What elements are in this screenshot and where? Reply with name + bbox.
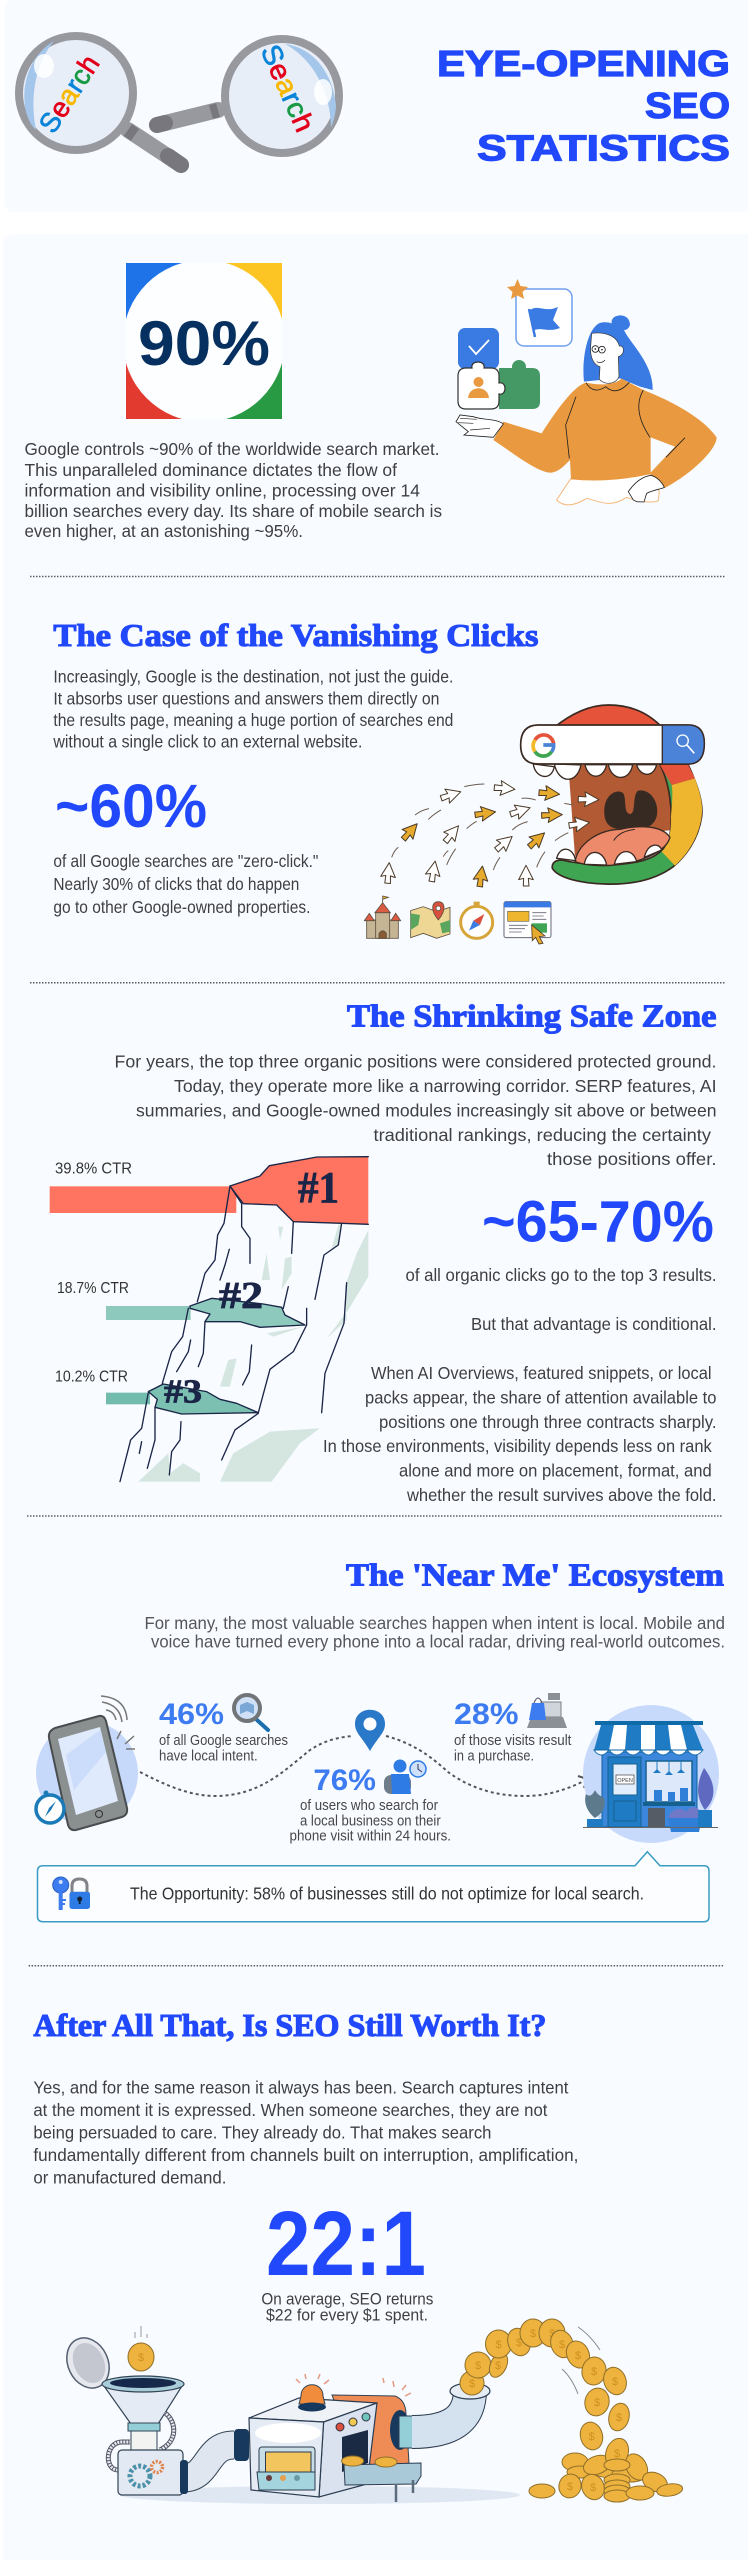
stat: 28 percent: of those visits result [454, 1732, 572, 1749]
text block: intro: Today, they operate more like a narrowing corridor. SERP features, AI [174, 1076, 716, 1096]
stat: 76 percent: phone visit within 24 hours. [290, 1828, 451, 1845]
heading: The Shrinking Safe Zone [347, 997, 716, 1033]
icon: magnifying glasses: Search [255, 40, 321, 136]
icon: storefront [583, 1705, 719, 1843]
coin pile: $ [614, 2448, 620, 2460]
text block: intro: It absorbs user questions and answers them directly on [53, 688, 439, 708]
stat: 22 to 1: 22:1 [266, 2193, 426, 2295]
stat: 28 percent: 28% [454, 1698, 518, 1731]
coins stream: $ [612, 2376, 618, 2388]
stat: 46 percent [159, 1695, 288, 1764]
icon: castle [364, 896, 401, 938]
section: market share [24, 260, 717, 541]
text block: top results: In those environments, visibility depends less on rank [323, 1436, 712, 1456]
coins stream: $ [616, 2412, 622, 2424]
coin pile: $ [567, 2481, 573, 2493]
text block: market share: Google controls ~90% of the worldwide search market. [24, 439, 440, 459]
section: vanishing clicks [52, 617, 704, 944]
text block: intro: without a single click to an external website. [52, 732, 362, 752]
caption: return on spend: $22 for every $1 spent. [266, 2307, 428, 2325]
stat: 76 percent [290, 1760, 451, 1845]
illustration: search bar mouth eating clicks [364, 705, 704, 944]
icon: magnifying glasses [19, 36, 339, 165]
title [437, 43, 730, 168]
text block: answer: fundamentally different from channels built on interruption, amplification, [33, 2145, 578, 2165]
coins stream: $ [495, 2339, 502, 2351]
chart: cliff of click-through rates: 10.2% CTR [55, 1369, 128, 1386]
stat: 46 percent: have local intent. [159, 1747, 258, 1764]
text block: intro: Increasingly, Google is the destination, not just the guide. [53, 667, 453, 687]
coin pile: $ [590, 2482, 596, 2494]
stat card: 90 percent [123, 260, 285, 422]
text block: top results: When AI Overviews, featured snippets, or local [371, 1363, 712, 1383]
heading: The Case of the Vanishing Clicks [53, 617, 538, 653]
coins stream: $ [594, 2397, 600, 2409]
text block: answer: at the moment it is expressed. When someone searches, they are not [33, 2100, 548, 2120]
icon: key and lock [53, 1877, 90, 1910]
icon: map [411, 902, 450, 938]
stat: 46 percent: of all Google searches [159, 1732, 288, 1749]
icon: map pin [355, 1710, 385, 1751]
heading: After All That, Is SEO Still Worth It? [33, 2007, 546, 2043]
callout: the opportunity [38, 1852, 709, 1922]
icon: person with clock [384, 1760, 426, 1794]
text block: top results: But that advantage is conditional. [471, 1314, 716, 1334]
text block: top results: alone and more on placement, format, and [399, 1461, 712, 1481]
coins stream: $ [495, 2360, 501, 2372]
title: STATISTICS [477, 128, 730, 168]
stat: 76 percent: 76% [313, 1764, 376, 1797]
illustration: coin machine [59, 2319, 683, 2504]
stat: 76 percent: of users who search for [300, 1797, 438, 1814]
coins stream: $ [549, 2328, 555, 2340]
text block: answer: or manufactured demand. [33, 2168, 226, 2188]
stat: 60 percent: ~60% [55, 772, 207, 840]
section: is seo worth it [33, 2007, 683, 2504]
chart: cliff of click-through rates: 18.7% CTR [57, 1280, 129, 1297]
text block: zero click: go to other Google-owned properties. [53, 897, 310, 917]
text block: answer: being persuaded to care. They already do. That makes search [33, 2123, 491, 2143]
text block: intro: traditional rankings, reducing the certainty [374, 1125, 711, 1145]
text block: top results: of all organic clicks go to the top 3 results. [406, 1265, 716, 1285]
text block: market share [24, 439, 442, 541]
section: shrinking safe zone [50, 997, 716, 1505]
chart: cliff of click-through rates: 39.8% CTR [55, 1160, 132, 1177]
icon: storefront: OPEN [617, 1778, 633, 1784]
text block: top results: packs appear, the share of attention available to [365, 1388, 716, 1408]
text block: market share: even higher, at an astonishing ~95%. [24, 521, 303, 541]
text block: market share: information and visibility online, processing over 14 [24, 480, 420, 500]
icon: funnel with coin: $ [138, 2352, 144, 2364]
text block: top results: whether the result survives above the fold. [406, 1485, 716, 1505]
coins stream: $ [559, 2339, 565, 2351]
icon: funnel with coin [59, 2326, 184, 2495]
title: SEO [645, 85, 730, 126]
callout: the opportunity: The Opportunity: 58% of businesses still do not optimize for local search. [130, 1883, 644, 1903]
section: near me ecosystem [36, 1557, 725, 1922]
coins stream: $ [516, 2337, 522, 2349]
text block: intro: For years, the top three organic positions were considered protected ground. [114, 1052, 716, 1072]
caption: return on spend [261, 2291, 433, 2325]
text block: market share: billion searches every day. Its share of mobile search is [24, 501, 442, 521]
illustration: woman with icons [456, 279, 717, 505]
text block: zero click: Nearly 30% of clicks that do happen [53, 874, 299, 894]
coins stream: $ [591, 2366, 597, 2378]
chart: cliff of click-through rates: #3 [164, 1374, 202, 1411]
stat: 28 percent [454, 1693, 572, 1764]
icon: cash register [527, 1693, 567, 1728]
text block: top results [323, 1265, 716, 1505]
text block: intro: For many, the most valuable searches happen when intent is local. Mobile and [144, 1613, 725, 1633]
caption: return on spend: On average, SEO returns [261, 2291, 433, 2309]
coins stream: $ [475, 2360, 481, 2372]
chart: cliff of click-through rates: #2 [219, 1275, 263, 1317]
text block: intro [114, 1052, 716, 1169]
text block: zero click: of all Google searches are "zero-click." [53, 851, 318, 871]
stat: 46 percent: 46% [159, 1698, 224, 1731]
text block: intro [144, 1613, 725, 1652]
chart: cliff of click-through rates: #1 [298, 1163, 339, 1212]
coins stream: $ [575, 2350, 581, 2362]
text block: intro: summaries, and Google-owned modules increasingly sit above or between [136, 1101, 716, 1121]
coin pile [529, 2435, 683, 2503]
icon: magnifying glasses: Search [33, 49, 105, 138]
text block: answer [33, 2077, 578, 2188]
coins stream: $ [469, 2378, 475, 2390]
stat: 28 percent: in a purchase. [454, 1747, 534, 1764]
icon: magnifier with map [234, 1695, 268, 1730]
stat: 76 percent: a local business on their [300, 1812, 441, 1829]
text block: market share: This unparalleled dominance dictates the flow of [24, 460, 397, 480]
text block: answer: Yes, and for the same reason it always has been. Search captures intent [33, 2077, 569, 2097]
panel: header [4, 0, 748, 212]
icon: phone [36, 1696, 138, 1830]
text block: top results: positions one through three contracts sharply. [379, 1412, 716, 1432]
text block: intro: voice have turned every phone into a local radar, driving real-world outcomes. [151, 1632, 725, 1652]
stat: 65 to 70 percent: ~65-70% [482, 1189, 714, 1254]
text block: intro: the results page, meaning a huge portion of searches end [53, 710, 453, 730]
text block: zero click [53, 851, 318, 917]
coins stream [460, 2319, 632, 2452]
coins stream: $ [588, 2431, 595, 2443]
stat card: 90 percent: 90% [138, 309, 270, 379]
text block: intro: those positions offer. [547, 1149, 716, 1169]
dotted journey path [140, 1736, 587, 1796]
coins stream: $ [530, 2328, 536, 2340]
icon: browser window [504, 902, 551, 944]
text block: intro [52, 667, 453, 752]
title: EYE-OPENING [437, 43, 730, 84]
heading: The 'Near Me' Ecosystem [346, 1557, 724, 1593]
icon: compass [461, 902, 493, 938]
chart: cliff of click-through rates [50, 1157, 368, 1482]
